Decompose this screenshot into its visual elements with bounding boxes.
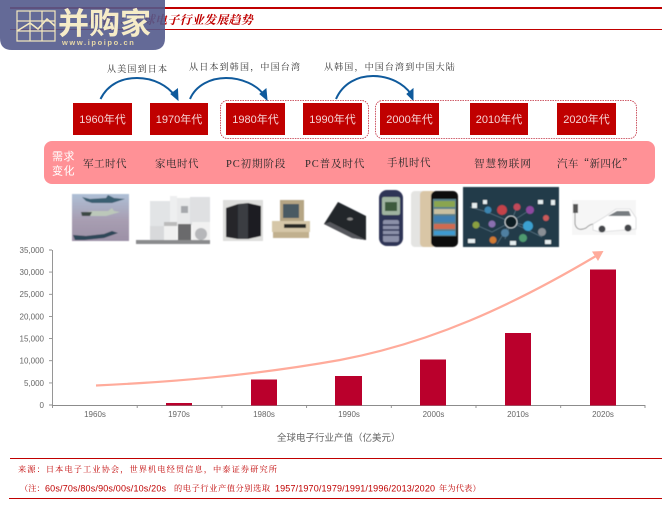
box: 1970s: 1970年代 xyxy=(156,112,202,126)
era: home appliances: 家电时代 xyxy=(155,157,199,170)
decade boxes xyxy=(73,103,616,135)
transfer label: Korea, Taiwan to mainland China: 从韩国，中国台湾到中国大陆 xyxy=(324,61,456,73)
box: 1980s: 1980年代 xyxy=(232,112,279,126)
box: 1990s: 1990年代 xyxy=(309,112,356,126)
annotation line: 的电子行业产值分别选取 xyxy=(174,483,271,493)
bar chart: global electronics output xyxy=(20,246,645,444)
transfer label: Japan to Korea, Taiwan: 从日本到韩国，中国台湾 xyxy=(189,61,301,73)
x-axis labels: 1960s xyxy=(84,410,106,419)
image: vintage PC xyxy=(272,200,310,238)
image: Nokia phone xyxy=(379,190,403,246)
box: 2020s xyxy=(557,103,616,135)
logo: www.ipoipo.cn xyxy=(61,38,135,47)
y-axis labels: 15,000 xyxy=(20,334,45,344)
x-axis labels: 1980s xyxy=(253,410,275,419)
trend arrow xyxy=(96,251,604,386)
image: IoT network xyxy=(463,187,559,247)
annotation line: （注： xyxy=(20,483,45,493)
title header: 图表1：全球电子行业发展趋势 xyxy=(88,11,254,28)
era: early PC: PC初期阶段 xyxy=(226,157,286,170)
era: military: 军工时代 xyxy=(83,157,127,170)
era: smart IoT: 智慧物联网 xyxy=(474,157,532,170)
band label: demand change: 变化 xyxy=(52,164,75,178)
box: 2010s: 2010年代 xyxy=(476,112,522,126)
annotation line: 年为代表） xyxy=(439,483,481,493)
y-axis labels: 10,000 xyxy=(20,356,45,366)
x-axis labels: 1970s xyxy=(168,410,190,419)
logo xyxy=(0,0,165,50)
image: laptop xyxy=(324,202,366,240)
transfer label: US to Japan: 从美国到日本 xyxy=(107,63,168,74)
source note xyxy=(9,458,662,499)
arrow: 1960s to 1970s xyxy=(100,78,178,100)
image: server racks xyxy=(223,200,263,241)
x-axis labels: 1990s xyxy=(338,410,360,419)
axes xyxy=(49,250,645,408)
image: fighter jets xyxy=(72,194,129,241)
x-axis labels: 2000s xyxy=(423,410,444,419)
dashed group: mobile and smart era xyxy=(376,100,636,138)
logo: 并购家 xyxy=(58,8,151,41)
image: home appliances xyxy=(136,196,210,244)
y-axis labels: 20,000 xyxy=(20,312,45,322)
era: PC adoption: PC普及时代 xyxy=(305,157,365,170)
chart caption: 全球电子行业产值（亿美元） xyxy=(277,432,401,444)
y-axis labels: 30,000 xyxy=(20,268,45,277)
x-axis labels: 2010s xyxy=(507,410,529,419)
box: 2000s: 2000年代 xyxy=(386,112,433,126)
image: electric car xyxy=(572,200,636,235)
y-axis labels xyxy=(20,246,45,410)
annotation line: 60s/70s/80s/90s/00s/10s/20s xyxy=(45,484,166,494)
box: 2010s xyxy=(470,103,528,135)
x-axis labels: 2020s xyxy=(592,410,614,419)
arrow: 1970s to 1980s xyxy=(190,78,267,100)
box: 1980s xyxy=(226,103,285,135)
band label: demand change: 需求 xyxy=(52,151,75,163)
box: 1960s: 1960年代 xyxy=(79,112,126,126)
y-axis labels: 25,000 xyxy=(20,290,45,299)
annotation line xyxy=(20,483,481,494)
bars xyxy=(166,270,616,406)
box: 2020s: 2020年代 xyxy=(563,112,610,126)
era: mobile phones: 手机时代 xyxy=(387,156,431,169)
box: 1970s xyxy=(150,103,208,135)
arrow: 1990s to 2000s xyxy=(336,76,413,100)
demand band xyxy=(44,141,655,184)
y-axis labels: 5,000 xyxy=(24,379,45,388)
y-axis labels: 35,000 xyxy=(20,246,45,255)
box: 1960s xyxy=(73,103,132,135)
y-axis labels: 0 xyxy=(40,401,45,410)
x-axis labels xyxy=(84,410,614,419)
image: iPhones xyxy=(411,191,458,247)
era: new four modernizations of cars: 汽车“新四化” xyxy=(557,156,633,171)
dashed group: PC era xyxy=(220,100,368,138)
annotation line: 1957/1970/1979/1991/1996/2013/2020 xyxy=(275,484,435,494)
box: 1990s xyxy=(303,103,362,135)
source line: 来源：日本电子工业协会，世界机电经贸信息，中泰证券研究所 xyxy=(18,464,278,475)
box: 2000s xyxy=(380,103,439,135)
